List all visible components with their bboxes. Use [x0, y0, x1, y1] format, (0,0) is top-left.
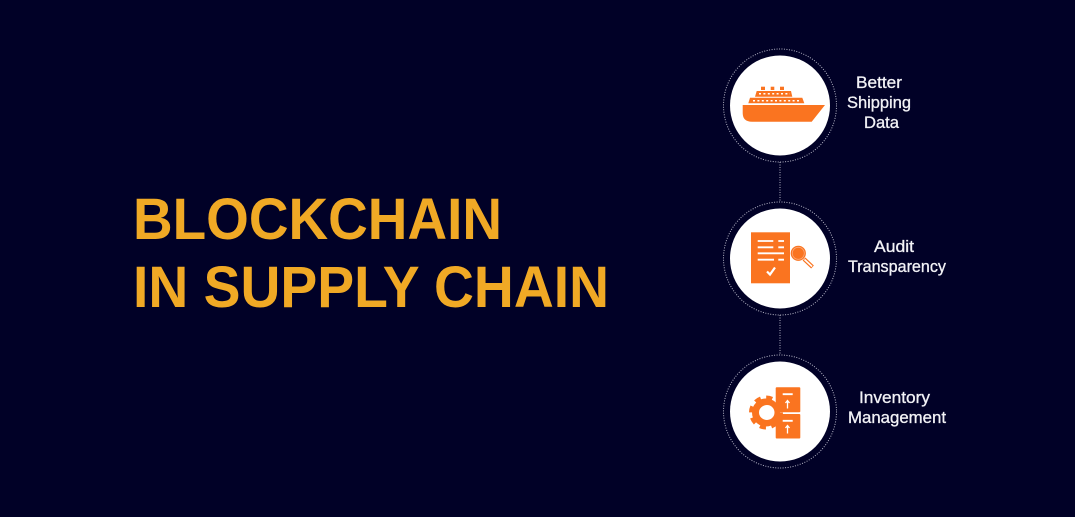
- item: audit transparency: [724, 202, 947, 315]
- label: [847, 74, 911, 132]
- label: Shipping: [847, 94, 911, 112]
- label: Transparency: [848, 258, 947, 276]
- item: better shipping data: [724, 49, 911, 162]
- dotted ring: [724, 202, 836, 315]
- title: IN SUPPLY CHAIN: [133, 255, 609, 320]
- label: Data: [864, 114, 900, 132]
- label: [848, 238, 947, 276]
- icon: audit document with magnifier: [751, 232, 812, 283]
- white disc: [730, 362, 830, 462]
- dotted ring: [724, 355, 836, 468]
- title: [133, 187, 609, 320]
- item: inventory management: [724, 355, 946, 468]
- label: Management: [848, 409, 946, 427]
- icon: gear with boxes: [752, 387, 800, 438]
- icon: cruise ship: [743, 87, 825, 122]
- label: [848, 389, 946, 427]
- label: Better: [856, 74, 903, 92]
- white disc: [730, 208, 830, 308]
- label: Inventory: [859, 389, 931, 407]
- label: Audit: [874, 238, 914, 256]
- dotted ring: [724, 49, 836, 162]
- dotted connector: audit to inventory: [779, 315, 781, 355]
- white disc: [730, 56, 830, 156]
- title: BLOCKCHAIN: [133, 187, 502, 252]
- dotted connector: shipping to audit: [779, 162, 781, 202]
